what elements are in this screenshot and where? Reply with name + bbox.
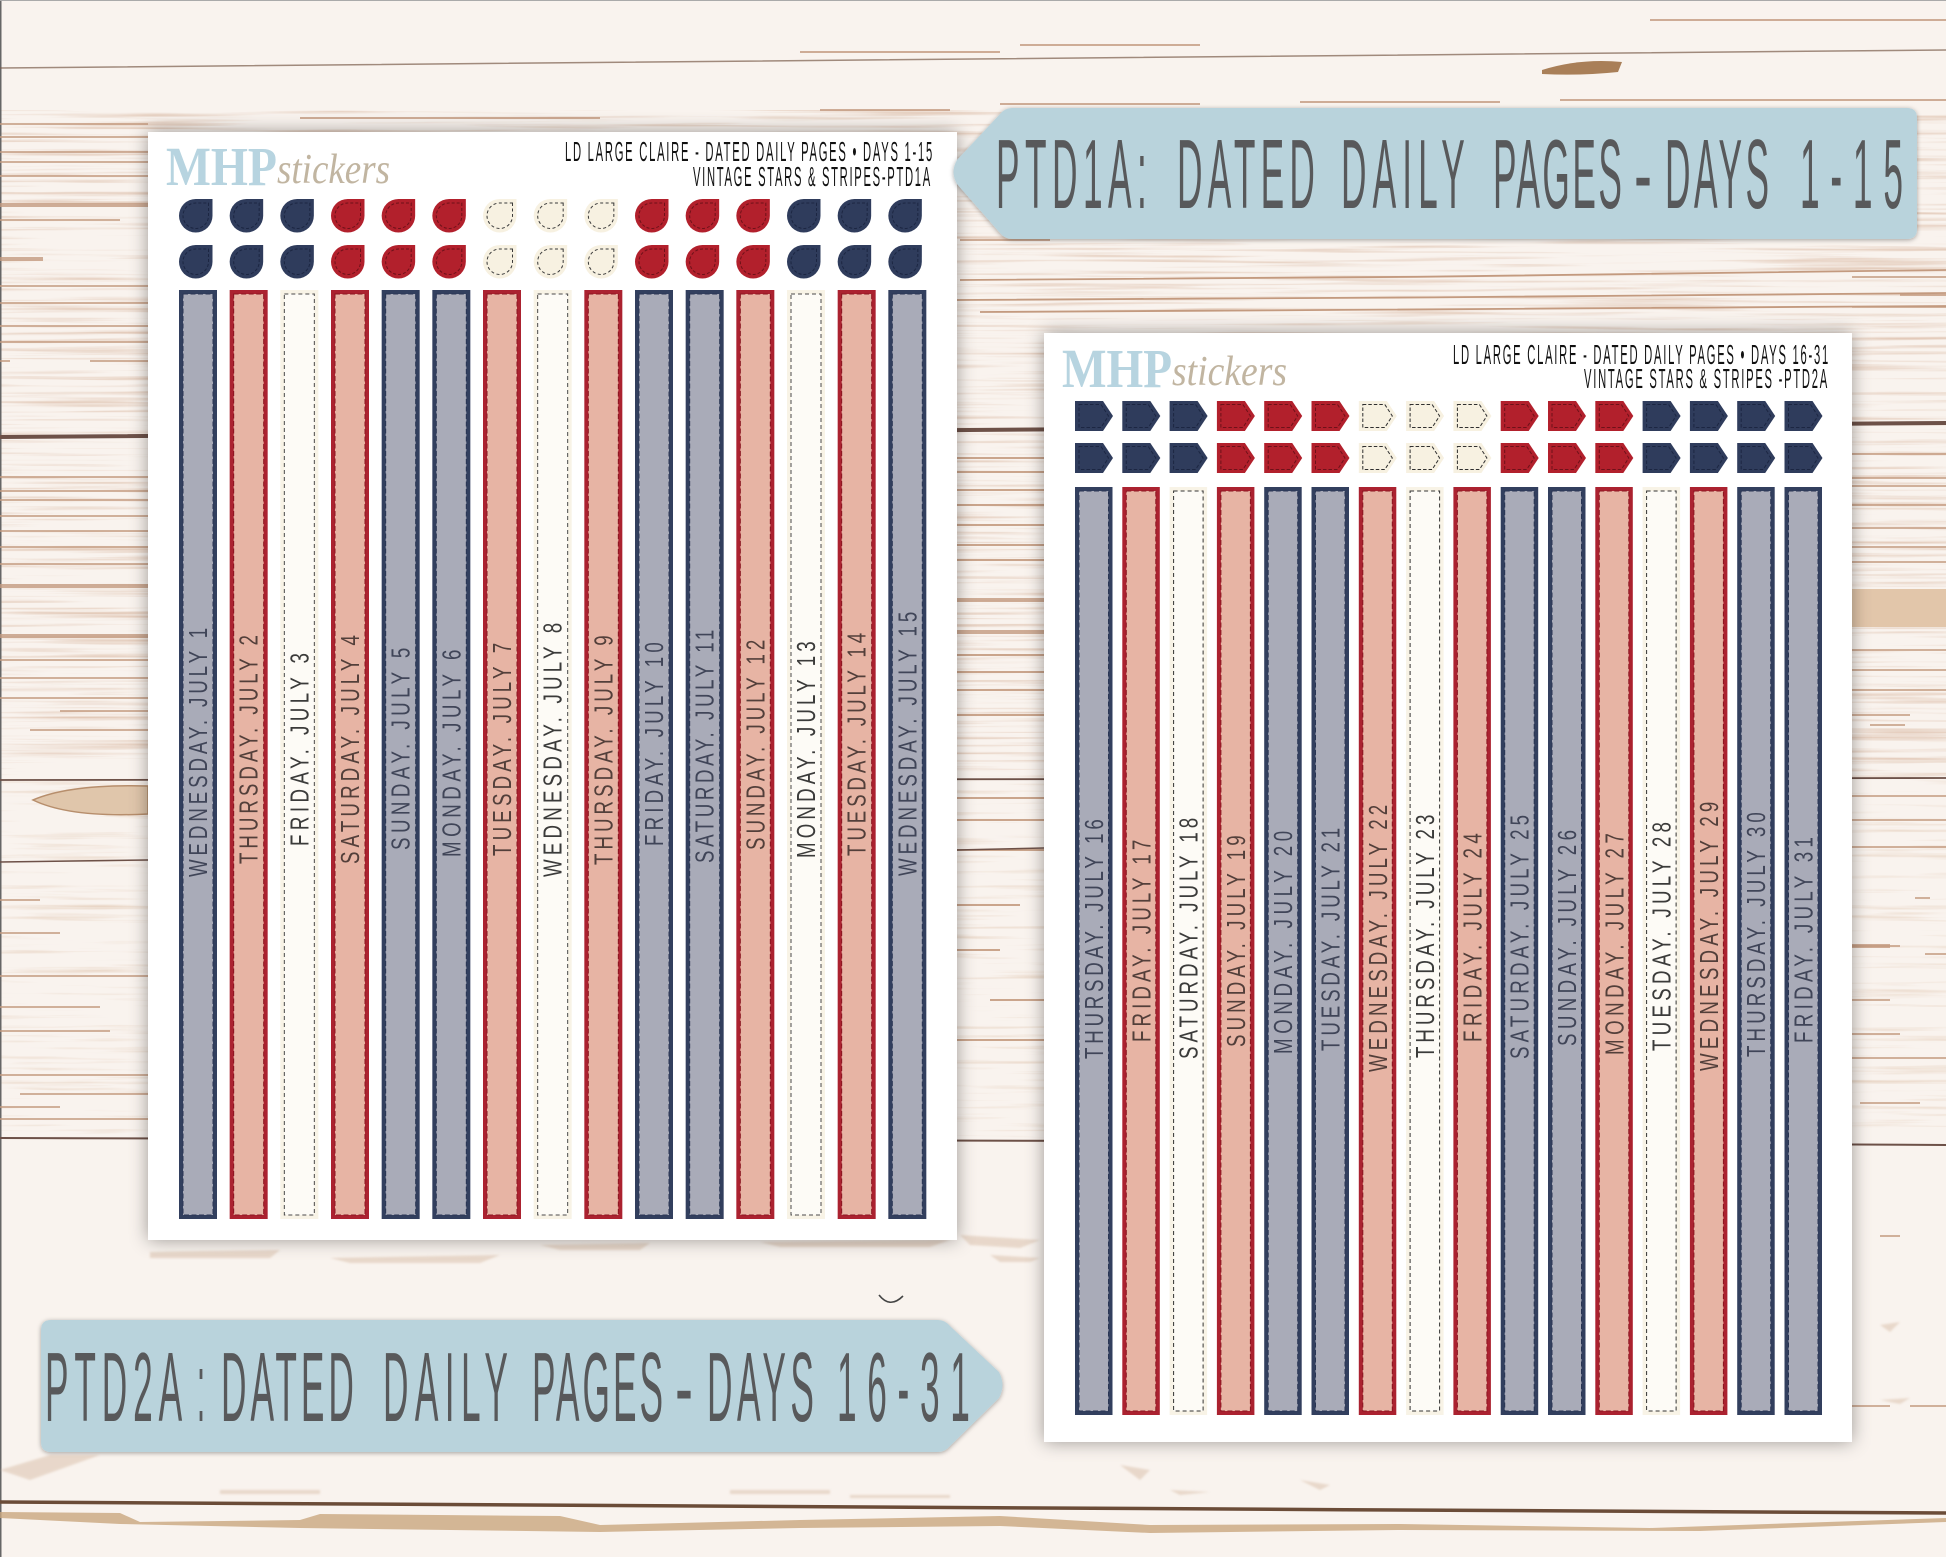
teardrop stickers, row 1 bbox=[179, 199, 922, 232]
date strip: July 7 bbox=[483, 290, 521, 1219]
flag tab stickers, row 1 bbox=[1075, 401, 1822, 431]
date strip: July 27: MONDAY. JULY 27 bbox=[1599, 833, 1629, 1055]
banner: PTD2A dated daily pages, days 16-31: - bbox=[675, 1332, 693, 1442]
date strip: July 9: THURSDAY. JULY 9 bbox=[588, 635, 618, 865]
banner: PTD1A dated daily pages, days 1-15 bbox=[954, 108, 1917, 239]
banner: PTD2A dated daily pages, days 16-31: 16-31 bbox=[837, 1332, 970, 1442]
date strip: July 13: MONDAY. JULY 13 bbox=[791, 641, 821, 858]
date strip: July 30 bbox=[1737, 487, 1775, 1415]
date strip: July 21: TUESDAY. JULY 21 bbox=[1315, 828, 1345, 1051]
date strip: July 20: MONDAY. JULY 20 bbox=[1268, 831, 1298, 1054]
sticker sheet: PTD2A days 16-31 bbox=[1044, 333, 1852, 1442]
date strip: July 25: SATURDAY. JULY 25 bbox=[1505, 815, 1534, 1059]
logo: MHP stickers: MHP bbox=[166, 136, 277, 197]
date strip: July 26 bbox=[1548, 487, 1586, 1415]
banner: PTD1A dated daily pages, days 1-15: PAGES bbox=[1493, 119, 1622, 229]
sheet title: VINTAGE STARS & STRIPES-PTD1A bbox=[693, 161, 931, 193]
sheet title bbox=[1453, 339, 1828, 395]
small curved mark bbox=[879, 1295, 903, 1302]
date strip: July 28: TUESDAY. JULY 28 bbox=[1646, 822, 1676, 1051]
date strip: July 24: FRIDAY. JULY 24 bbox=[1457, 833, 1487, 1042]
date strip: July 17 bbox=[1122, 487, 1160, 1415]
date strip: July 4 bbox=[331, 290, 369, 1219]
date strip: July 8: WEDNESDAY. JULY 8 bbox=[538, 623, 567, 877]
logo: MHP stickers: stickers bbox=[277, 147, 390, 193]
date strip: July 10: FRIDAY. JULY 10 bbox=[639, 642, 669, 846]
logo: MHP stickers bbox=[1062, 338, 1287, 399]
banner: PTD2A dated daily pages, days 16-31: : bbox=[197, 1332, 205, 1442]
date strip: July 25 bbox=[1501, 487, 1538, 1415]
date strip: July 2: THURSDAY. JULY 2 bbox=[234, 635, 263, 864]
date strip: July 7: TUESDAY. JULY 7 bbox=[487, 643, 517, 856]
date strip: July 5 bbox=[382, 290, 420, 1219]
date strip: July 13 bbox=[787, 290, 825, 1219]
date strip: July 15: WEDNESDAY. JULY 15 bbox=[892, 612, 922, 876]
date strip: July 14 bbox=[838, 290, 876, 1219]
date strip: July 1: WEDNESDAY. JULY 1 bbox=[183, 628, 213, 877]
date strip: July 29 bbox=[1690, 487, 1727, 1415]
banner: PTD2A dated daily pages, days 16-31: DAYS bbox=[707, 1332, 814, 1442]
date strip: July 5: SUNDAY. JULY 5 bbox=[386, 648, 415, 850]
date strip: July 4: SATURDAY. JULY 4 bbox=[335, 635, 365, 864]
date strip: July 27 bbox=[1595, 487, 1633, 1415]
date strip: July 16 bbox=[1075, 487, 1112, 1415]
date strip: July 31: FRIDAY. JULY 31 bbox=[1788, 837, 1818, 1043]
date strip: July 17: FRIDAY. JULY 17 bbox=[1126, 840, 1156, 1042]
date strip: July 3 bbox=[280, 290, 318, 1219]
date strip: July 15 bbox=[888, 290, 926, 1219]
banner: PTD2A dated daily pages, days 16-31: DAILY bbox=[383, 1332, 508, 1442]
banner: PTD1A dated daily pages, days 1-15: DAILY bbox=[1341, 119, 1465, 229]
banner: PTD1A dated daily pages, days 1-15: 1-15 bbox=[1800, 119, 1903, 229]
date strip: July 18 bbox=[1170, 487, 1207, 1415]
date strip: July 29: WEDNESDAY. JULY 29 bbox=[1694, 802, 1724, 1071]
date strip: July 11: SATURDAY. JULY 11 bbox=[690, 630, 719, 863]
date strip: July 28 bbox=[1643, 487, 1680, 1415]
date strip: July 30: THURSDAY. JULY 30 bbox=[1741, 812, 1771, 1057]
sheet title: LD LARGE CLAIRE - DATED DAILY PAGES • DAYS 16-31 bbox=[1453, 339, 1828, 371]
date strip: July 8 bbox=[534, 290, 572, 1219]
date strip: July 26: SUNDAY. JULY 26 bbox=[1552, 830, 1582, 1046]
banner: PTD2A dated daily pages, days 16-31: DATED bbox=[221, 1332, 354, 1442]
banner: PTD1A dated daily pages, days 1-15: PTD1A: bbox=[996, 119, 1147, 229]
date strip: July 2 bbox=[230, 290, 268, 1219]
date strip: July 12: SUNDAY. JULY 12 bbox=[740, 640, 770, 850]
plank seams bbox=[0, 423, 1946, 1513]
banner: PTD2A dated daily pages, days 16-31: PTD2A bbox=[45, 1332, 182, 1442]
logo: MHP stickers bbox=[166, 136, 390, 197]
date strip: July 6 bbox=[432, 290, 470, 1219]
date strip: July 9 bbox=[584, 290, 622, 1219]
date strip: July 20 bbox=[1264, 487, 1302, 1415]
date strip: July 31 bbox=[1784, 487, 1822, 1415]
date strip: July 14: TUESDAY. JULY 14 bbox=[842, 633, 871, 856]
date strip: July 3: FRIDAY. JULY 3 bbox=[284, 653, 314, 846]
date strip: July 10 bbox=[635, 290, 673, 1219]
sticker sheet: PTD1A days 1-15 bbox=[148, 132, 957, 1240]
date strip: July 18: SATURDAY. JULY 18 bbox=[1173, 818, 1203, 1059]
date strip: July 22: WEDNESDAY. JULY 22 bbox=[1363, 805, 1393, 1072]
date strip: July 11 bbox=[686, 290, 724, 1219]
date strip: July 24 bbox=[1453, 487, 1491, 1415]
date strip: July 1 bbox=[179, 290, 217, 1219]
date strip: July 23: THURSDAY. JULY 23 bbox=[1410, 815, 1440, 1058]
logo: MHP stickers: MHP bbox=[1062, 338, 1172, 399]
date strip: July 16: THURSDAY. JULY 16 bbox=[1079, 819, 1109, 1059]
date strip: July 19: SUNDAY. JULY 19 bbox=[1221, 835, 1251, 1047]
teardrop stickers, row 2 bbox=[179, 245, 922, 278]
logo: MHP stickers: stickers bbox=[1172, 349, 1287, 395]
sheet title: VINTAGE STARS & STRIPES -PTD2A bbox=[1584, 363, 1828, 395]
banner: PTD1A dated daily pages, days 1-15: DATED bbox=[1177, 119, 1315, 229]
date strip: July 21 bbox=[1312, 487, 1349, 1415]
sheet title: LD LARGE CLAIRE - DATED DAILY PAGES • DAYS 1-15 bbox=[565, 136, 932, 168]
banner: PTD1A dated daily pages, days 1-15: DAYS bbox=[1665, 119, 1769, 229]
banner: PTD2A dated daily pages, days 16-31 bbox=[41, 1320, 1002, 1452]
date strip: July 12 bbox=[736, 290, 774, 1219]
banner: PTD2A dated daily pages, days 16-31: PAGES bbox=[532, 1332, 663, 1442]
wood knot bbox=[33, 786, 148, 815]
date strip: July 6: MONDAY. JULY 6 bbox=[436, 650, 466, 857]
banner: PTD1A dated daily pages, days 1-15: - bbox=[1634, 119, 1652, 229]
flag tab stickers, row 2 bbox=[1075, 443, 1822, 473]
date strip: July 19 bbox=[1217, 487, 1254, 1415]
sheet title bbox=[565, 136, 932, 193]
date strip: July 23 bbox=[1406, 487, 1444, 1415]
date strip: July 22 bbox=[1359, 487, 1396, 1415]
